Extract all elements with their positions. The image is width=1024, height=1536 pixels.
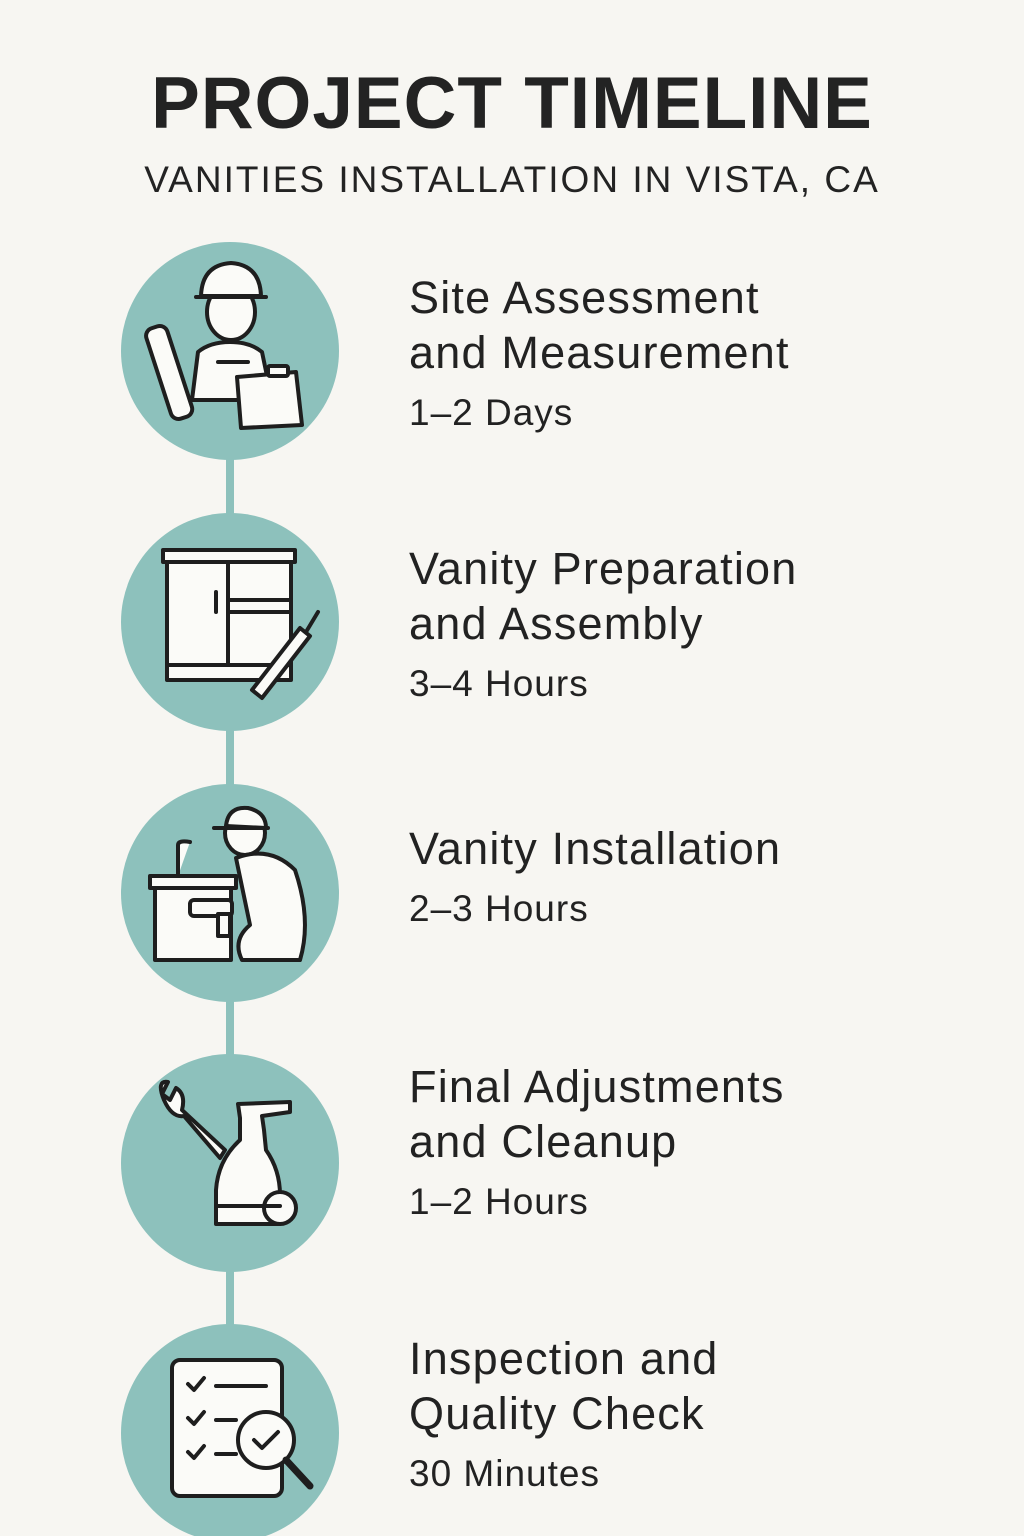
icon circle 4: wrench and spray bottle <box>121 1054 339 1272</box>
step 1 text: 1–2 Days <box>409 392 573 433</box>
step 4 text: 1–2 Hours <box>409 1181 589 1222</box>
icon circle 5: checklist with magnifier <box>121 1324 339 1536</box>
subtitle: VANITIES INSTALLATION IN VISTA, CA <box>144 159 880 200</box>
step 2 text <box>409 543 797 704</box>
icon circle 1: worker with blueprint <box>121 242 339 460</box>
step 3 text: 2–3 Hours <box>409 888 589 929</box>
step 5 text <box>409 1333 719 1494</box>
connector line <box>226 440 234 1440</box>
step 2 text: Vanity Preparation <box>409 543 797 594</box>
step 4 text <box>409 1061 785 1222</box>
step 3 text <box>409 823 781 929</box>
step 1 text: Site Assessment <box>409 272 760 323</box>
icon circle 2: cabinet and screwdriver <box>121 513 339 731</box>
icon circle 3: installer with drill <box>121 784 339 1002</box>
title: PROJECT TIMELINE <box>151 63 873 144</box>
step 5 text: 30 Minutes <box>409 1453 600 1494</box>
step 1 text <box>409 272 790 433</box>
step 4 text: and Cleanup <box>409 1116 677 1167</box>
step 4 text: Final Adjustments <box>409 1061 785 1112</box>
step 3 text: Vanity Installation <box>409 823 781 874</box>
step 2 text: and Assembly <box>409 598 704 649</box>
step 2 text: 3–4 Hours <box>409 663 589 704</box>
step 1 text: and Measurement <box>409 327 790 378</box>
step 5 text: Inspection and <box>409 1333 719 1384</box>
step 5 text: Quality Check <box>409 1388 705 1439</box>
